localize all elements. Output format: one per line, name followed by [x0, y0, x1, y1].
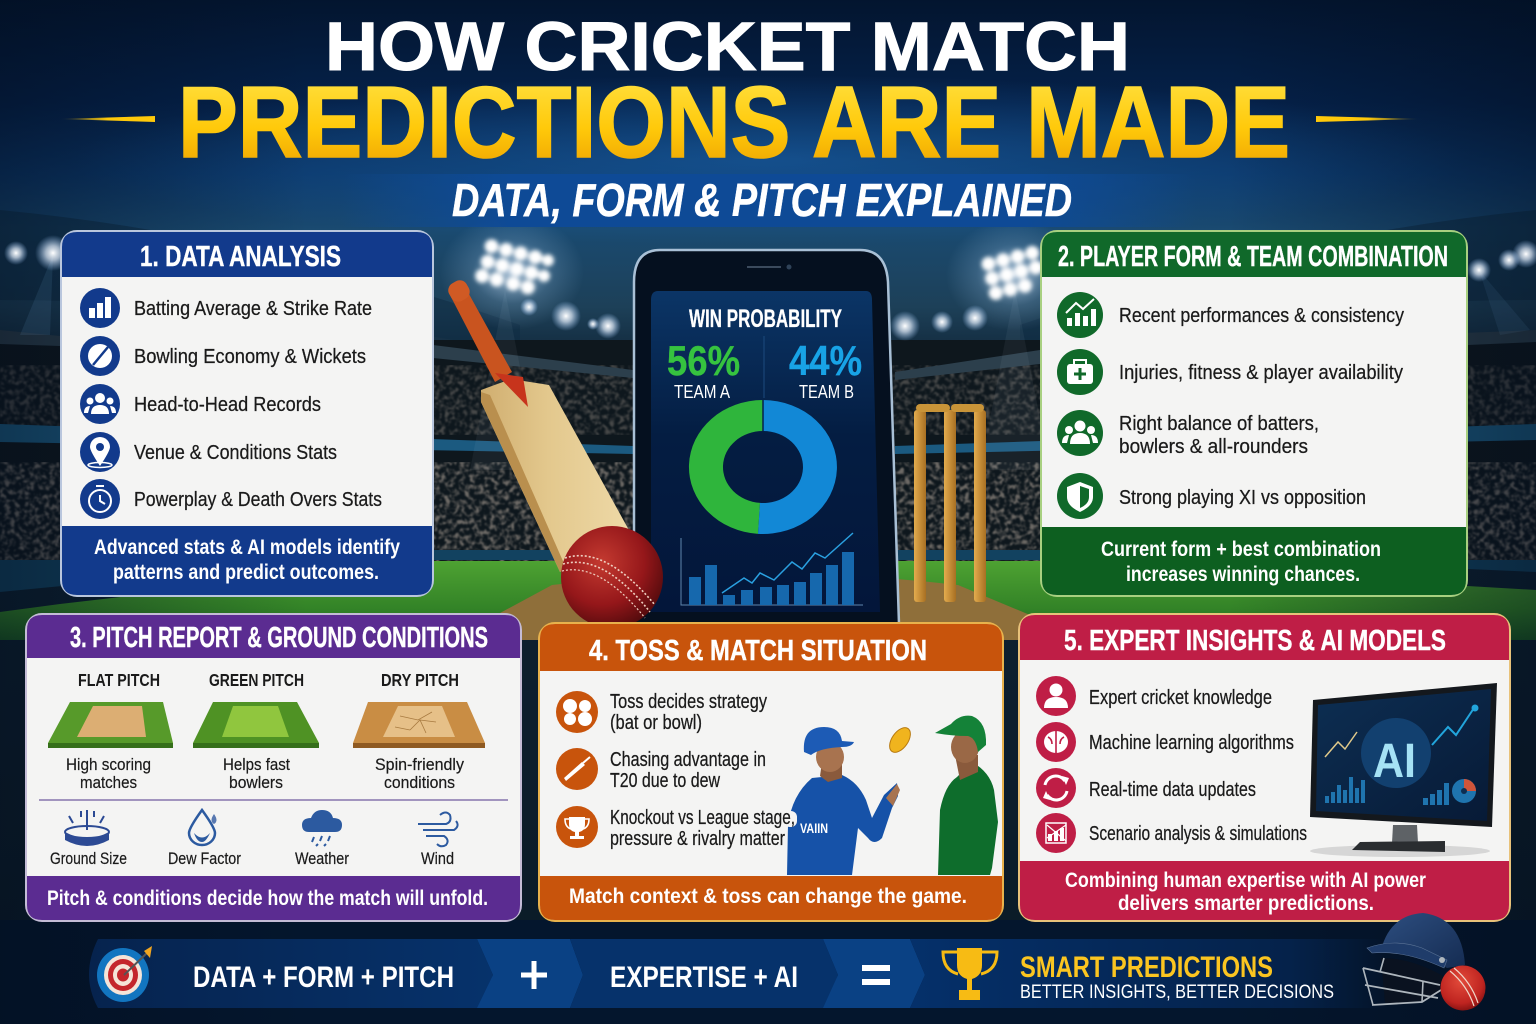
- green pitch: GREEN PITCH: [209, 670, 304, 690]
- flat pitch: matches: [80, 773, 137, 792]
- item: bowling economy: [80, 336, 366, 376]
- panel 2 takeaway: [1101, 538, 1381, 586]
- icon: wind: [418, 812, 458, 868]
- item: injuries and fitness: Injuries, fitness & player availability: [1119, 362, 1403, 384]
- item: machine learning: [1036, 722, 1294, 762]
- panel 2 takeaway: increases winning chances.: [1126, 563, 1360, 586]
- icon: weather: Weather: [295, 849, 349, 868]
- item: real-time updates: Real-time data updates: [1089, 779, 1256, 801]
- dry pitch: DRY PITCH: [381, 670, 459, 690]
- item: toss strategy: Toss decides strategy: [610, 691, 767, 713]
- item: real-time updates: [1036, 768, 1256, 808]
- illustration: cricket ball: [561, 526, 663, 628]
- gold line right: [1316, 116, 1420, 122]
- panel 1 takeaway: [94, 536, 400, 584]
- item: scenario analysis: [1036, 813, 1307, 853]
- formula bar: [89, 913, 1486, 1010]
- item: recent performances: Recent performances & consistency: [1119, 305, 1404, 327]
- item: toss strategy: (bat or bowl): [610, 712, 702, 734]
- item: machine learning: Machine learning algorithms: [1089, 732, 1294, 754]
- subtitle: DATA, FORM & PITCH EXPLAINED: [452, 174, 1072, 226]
- item: venue: Venue & Conditions Stats: [134, 442, 337, 464]
- team A probability: [667, 337, 740, 402]
- flat pitch: [48, 670, 173, 792]
- panel 5 takeaway: [1065, 869, 1426, 915]
- bar and line chart: [681, 533, 863, 605]
- item: chasing advantage: Chasing advantage in: [610, 749, 766, 771]
- green pitch: [193, 670, 319, 792]
- result: smart predictions: SMART PREDICTIONS: [1020, 951, 1273, 984]
- item: bowling economy: Bowling Economy & Wickets: [134, 346, 366, 368]
- result: smart predictions: BETTER INSIGHTS, BETTER DECISIONS: [1020, 982, 1334, 1003]
- item: knockout vs league: Knockout vs League stage,: [610, 807, 795, 829]
- panel 1 heading: 1. DATA ANALYSIS: [140, 241, 341, 273]
- illustration: captain in blue tossing coin: VAIIN: [800, 820, 828, 836]
- item: expert knowledge: Expert cricket knowledge: [1089, 687, 1272, 709]
- plus sign: [521, 961, 547, 989]
- item: scenario analysis: Scenario analysis & simulations: [1089, 823, 1307, 845]
- panel 3 heading: 3. PITCH REPORT & GROUND CONDITIONS: [70, 622, 488, 654]
- item: team balance: Right balance of batters,: [1119, 413, 1319, 435]
- icon: dew factor: Dew Factor: [168, 849, 241, 868]
- panel 5: expert insights and AI models: [1019, 614, 1510, 921]
- item: powerplay: Powerplay & Death Overs Stats: [134, 489, 382, 511]
- formula: data form pitch: DATA + FORM + PITCH: [193, 961, 454, 994]
- item: batting average: Batting Average & Strike Rate: [134, 298, 372, 320]
- dry pitch: [353, 670, 485, 792]
- panel 1 takeaway: Advanced stats & AI models identify: [94, 536, 400, 559]
- team B probability: 44%: [789, 337, 862, 384]
- illustration: captain in blue tossing coin: [787, 727, 900, 875]
- panel 4 takeaway: Match context & toss can change the game.: [569, 885, 967, 908]
- item: toss strategy: [556, 691, 767, 734]
- panel 5 takeaway: delivers smarter predictions.: [1118, 892, 1374, 915]
- item: chasing advantage: [556, 748, 766, 792]
- panel 1 takeaway: patterns and predict outcomes.: [113, 561, 379, 584]
- illustration: stumps: [914, 404, 986, 602]
- illustration: captain in green: [935, 716, 998, 875]
- panel 3 takeaway: Pitch & conditions decide how the match will unfold.: [47, 887, 488, 910]
- illustration: phone: [634, 250, 899, 624]
- icon: dew factor: [168, 810, 241, 868]
- panel 4 heading: 4. TOSS & MATCH SITUATION: [589, 635, 927, 667]
- panel 3: pitch report and ground conditions: [26, 614, 521, 921]
- icon: wind: Wind: [421, 849, 454, 868]
- title highlight: PREDICTIONS ARE MADE: [178, 67, 1290, 179]
- flat pitch: High scoring: [66, 755, 151, 774]
- item: head-to-head: Head-to-Head Records: [134, 394, 321, 416]
- floodlights: [4, 214, 1536, 341]
- dry pitch: Spin-friendly: [375, 755, 464, 774]
- item: venue: [80, 432, 337, 472]
- item: batting average: [80, 288, 372, 328]
- illustration: AI monitor: [1310, 683, 1497, 857]
- item: knockout vs league: pressure & rivalry matter: [610, 828, 785, 850]
- icon: helmet and ball: [1363, 913, 1486, 1010]
- item: team balance: [1057, 410, 1319, 458]
- panel 5 takeaway: Combining human expertise with AI power: [1065, 869, 1426, 892]
- dry pitch: conditions: [384, 773, 455, 792]
- item: powerplay: [80, 479, 382, 519]
- icon: ground size: [50, 810, 127, 868]
- item: injuries and fitness: [1057, 349, 1403, 395]
- green pitch: bowlers: [229, 773, 283, 792]
- title: [178, 8, 1290, 179]
- item: head-to-head: [80, 384, 321, 424]
- icon: gold coin: [885, 724, 915, 756]
- team B probability: TEAM B: [799, 382, 854, 402]
- item: expert knowledge: [1036, 676, 1272, 716]
- item: strong playing XI: Strong playing XI vs opposition: [1119, 487, 1366, 509]
- AI label: AI: [1373, 735, 1416, 788]
- team A probability: 56%: [667, 337, 740, 384]
- result: smart predictions: [1020, 951, 1334, 1003]
- icon: weather: [295, 810, 349, 868]
- panel 1: data analysis: [61, 231, 433, 596]
- win probability donut chart: [689, 400, 837, 534]
- equals sign: [862, 968, 890, 982]
- title: HOW CRICKET MATCH: [325, 8, 1130, 85]
- icon: target: [97, 946, 152, 1002]
- panel 2 takeaway: Current form + best combination: [1101, 538, 1381, 561]
- item: chasing advantage: T20 due to dew: [610, 770, 720, 792]
- panel 2: player form and team combination: [1041, 231, 1467, 596]
- phone heading: WIN PROBABILITY: [689, 305, 842, 333]
- flat pitch: FLAT PITCH: [78, 670, 160, 690]
- team B probability: [789, 337, 862, 402]
- item: team balance: bowlers & all-rounders: [1119, 436, 1308, 458]
- team A probability: TEAM A: [674, 382, 730, 402]
- item: recent performances: [1057, 292, 1404, 338]
- item: strong playing XI: [1057, 473, 1366, 519]
- gold line left: [60, 116, 155, 122]
- item: knockout vs league: [556, 806, 797, 850]
- icon: trophy: [943, 948, 997, 1000]
- panel 4: toss and match situation: [539, 623, 1003, 921]
- illustration: cricket bat: [445, 277, 630, 572]
- green pitch: Helps fast: [223, 755, 290, 774]
- icon: ground size: Ground Size: [50, 849, 127, 868]
- formula: expertise AI: EXPERTISE + AI: [610, 961, 798, 994]
